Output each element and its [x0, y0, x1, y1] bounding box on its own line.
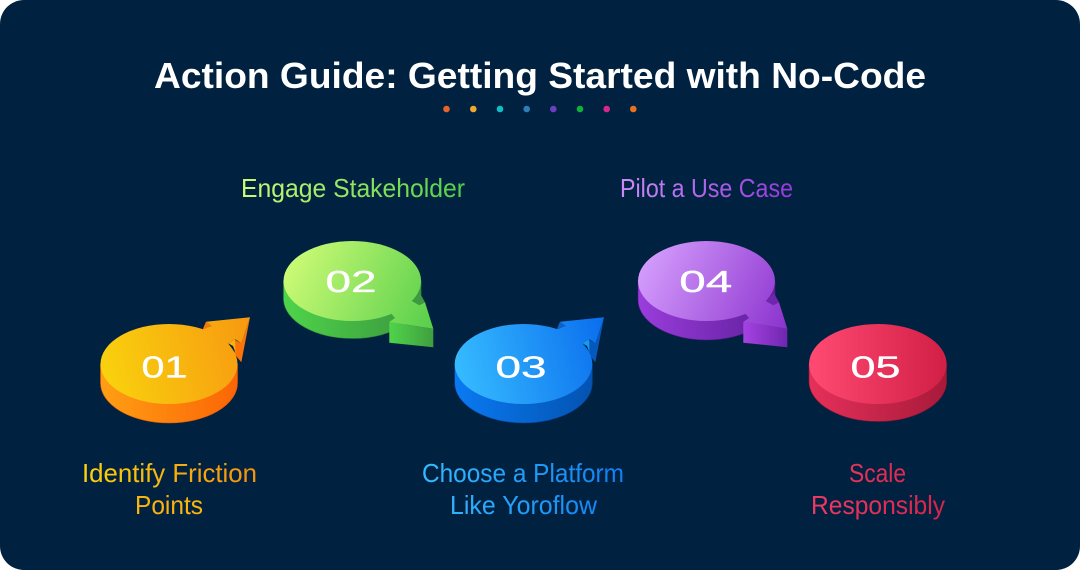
arrow shaded sides	[556, 317, 604, 362]
disc side	[638, 281, 775, 340]
label: Scale Responsibly: Responsibly	[811, 490, 945, 520]
arrow shaded sides	[389, 293, 433, 347]
label: Scale Responsibly	[811, 458, 945, 520]
number 05: 05	[850, 350, 900, 385]
disc top face	[455, 324, 592, 404]
disc top face	[809, 324, 947, 404]
disc top face	[638, 241, 775, 321]
disc top face	[284, 241, 421, 321]
label: Scale Responsibly: Scale	[849, 458, 906, 488]
label: Identify Friction Points: Points	[135, 490, 203, 520]
label: Choose a Platform Like Yoroflow	[422, 458, 624, 520]
step 05 disc	[809, 324, 947, 421]
label: Choose a Platform Like Yoroflow: Choose a Platform	[422, 458, 624, 488]
step 01 disc with arrow	[100, 317, 250, 423]
disc side	[455, 364, 592, 423]
arrow shaded sides	[743, 293, 787, 347]
disc top face	[100, 324, 238, 404]
step 04 disc with arrow	[638, 241, 787, 347]
disc side	[284, 281, 421, 338]
disc side	[100, 364, 238, 423]
label: Identify Friction Points: Identify Friction	[82, 458, 257, 488]
label: Pilot a Use Case: Pilot a Use Case	[620, 173, 793, 203]
arrow top face	[544, 317, 604, 360]
label: Choose a Platform Like Yoroflow: Like Yoroflow	[450, 490, 597, 520]
number 02: 02	[326, 264, 376, 299]
title: Action Guide: Getting Started with No-Code	[154, 55, 926, 96]
number 04: 04	[679, 264, 732, 299]
title dots	[443, 106, 637, 112]
disc side	[809, 364, 946, 421]
arrow top face	[190, 317, 250, 360]
step 02 disc with arrow	[284, 241, 433, 347]
step 03 disc with arrow	[455, 317, 604, 423]
arrow top face	[380, 300, 433, 329]
number 03: 03	[496, 350, 546, 385]
number 01: 01	[142, 350, 188, 385]
label: Identify Friction Points	[82, 458, 257, 520]
arrow shaded sides	[202, 317, 250, 362]
label: Engage Stakeholder: Engage Stakeholder	[241, 173, 465, 203]
arrow top face	[734, 300, 787, 329]
